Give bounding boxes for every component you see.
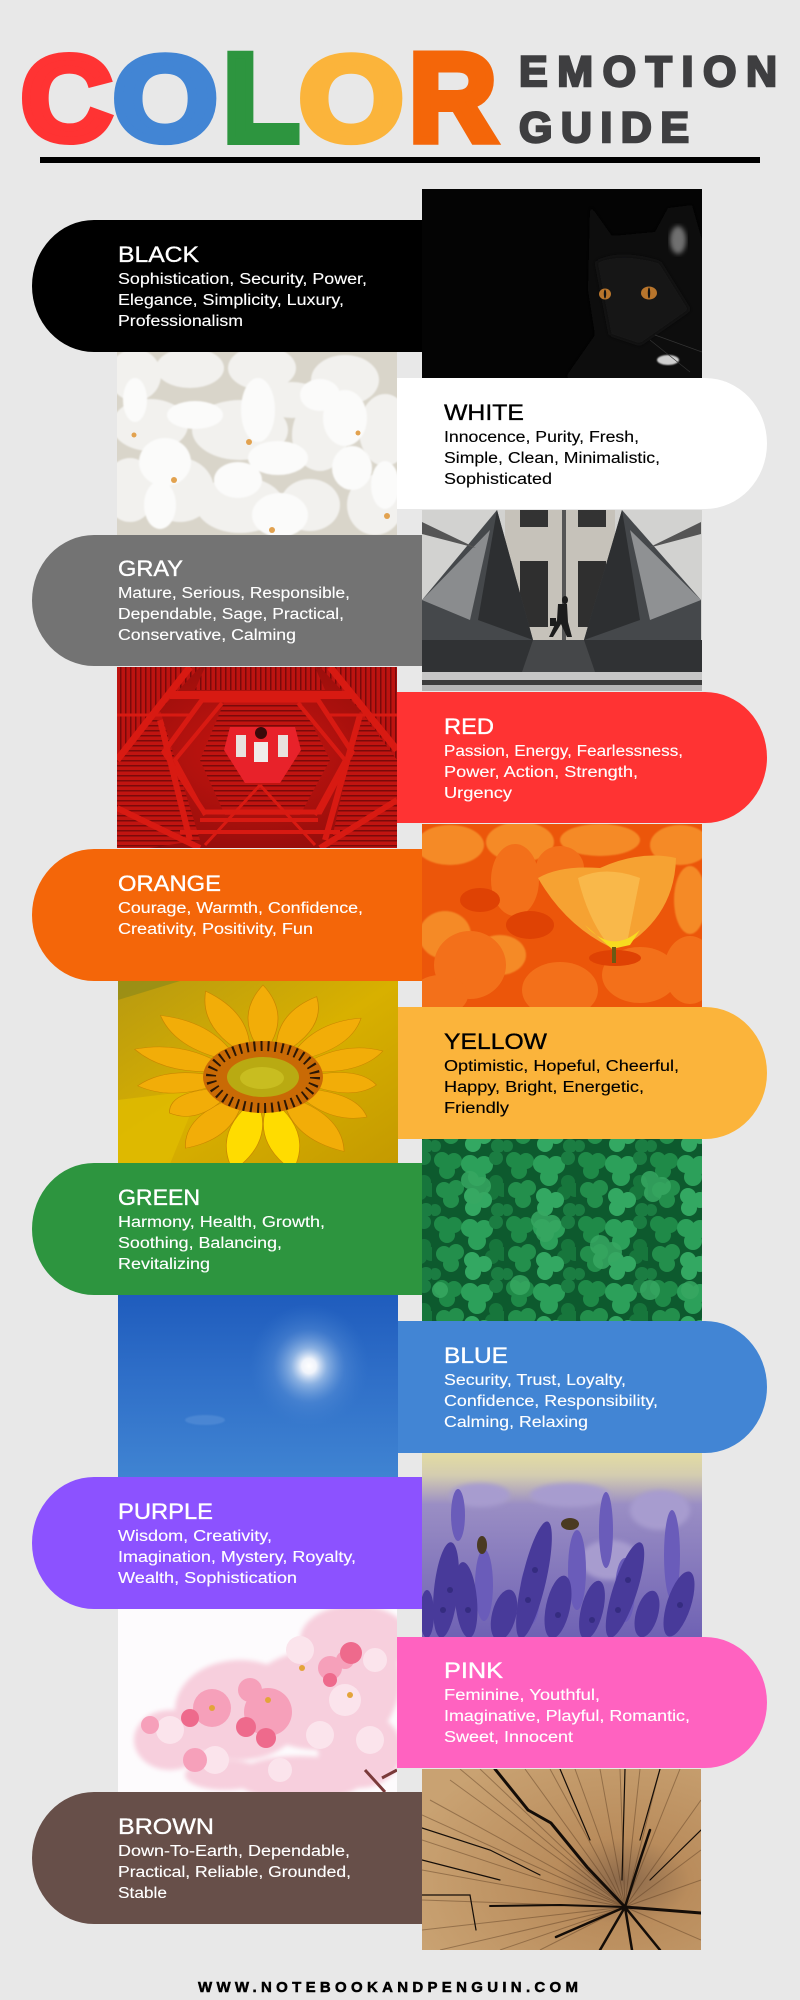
blue heading: BLUE xyxy=(444,1343,508,1368)
green description: Soothing, Balancing, xyxy=(118,1235,282,1252)
yellow pill xyxy=(398,1007,767,1139)
red description: Power, Action, Strength, xyxy=(444,764,638,781)
white heading: WHITE xyxy=(444,400,524,425)
black pill xyxy=(32,220,422,352)
purple description xyxy=(118,1528,356,1587)
photo: green clover xyxy=(422,1139,702,1321)
yellow description: Happy, Bright, Energetic, xyxy=(444,1079,644,1096)
brown description: Practical, Reliable, Grounded, xyxy=(118,1864,351,1881)
big yellow tulip xyxy=(538,856,676,963)
brown description xyxy=(118,1843,351,1902)
purple description: Imagination, Mystery, Royalty, xyxy=(118,1549,356,1566)
brown description: Stable xyxy=(118,1885,167,1902)
white pill xyxy=(397,378,767,509)
gray description: Conservative, Calming xyxy=(118,627,296,644)
green pill xyxy=(32,1163,422,1295)
pink heading: PINK xyxy=(444,1658,503,1683)
gray description xyxy=(118,585,350,644)
purple description: Wisdom, Creativity, xyxy=(118,1528,272,1545)
blue description: Confidence, Responsibility, xyxy=(444,1393,658,1410)
title: COLOR: R xyxy=(409,29,497,168)
pink description xyxy=(444,1687,690,1746)
photo: blue sky with sun xyxy=(118,1295,398,1477)
red heading: RED xyxy=(444,714,494,739)
panel: gray xyxy=(32,535,422,666)
blue description xyxy=(444,1372,658,1431)
pink description: Feminine, Youthful, xyxy=(444,1687,600,1704)
purple description: Wealth, Sophistication xyxy=(118,1570,297,1587)
orange heading: ORANGE xyxy=(118,871,221,896)
title: COLOR: O xyxy=(299,32,404,165)
panel: yellow xyxy=(398,1007,767,1139)
photo: black cat xyxy=(422,189,702,378)
orange description: Courage, Warmth, Confidence, xyxy=(118,900,363,917)
title: COLOR: O xyxy=(113,32,218,165)
panel: green xyxy=(32,1163,422,1295)
black description: Sophistication, Security, Power, xyxy=(118,271,367,288)
title rule xyxy=(40,157,760,163)
subtitle: EMOTION GUIDE xyxy=(519,48,777,152)
blue description: Calming, Relaxing xyxy=(444,1414,588,1431)
brown heading: BROWN xyxy=(118,1814,214,1839)
brown description: Down-To-Earth, Dependable, xyxy=(118,1843,350,1860)
panel: pink xyxy=(397,1637,767,1768)
brown pill xyxy=(32,1792,422,1924)
purple heading: PURPLE xyxy=(118,1499,213,1524)
title: COLOR: C xyxy=(21,33,112,166)
title: COLOR: L xyxy=(223,29,299,168)
photo: lavender xyxy=(422,1453,702,1637)
photo: white flowers xyxy=(117,352,397,535)
blue pill xyxy=(398,1321,767,1453)
orange description xyxy=(118,900,363,938)
photo: red temple ceiling xyxy=(117,667,397,848)
title: COLOR xyxy=(21,29,497,168)
yellow heading: YELLOW xyxy=(444,1029,547,1054)
orange pill xyxy=(32,849,422,981)
photo: sunflower xyxy=(118,981,398,1163)
gray description: Mature, Serious, Responsible, xyxy=(118,585,350,602)
white description: Sophisticated xyxy=(444,471,552,488)
yellow description: Friendly xyxy=(444,1100,509,1117)
panel: white xyxy=(397,378,767,509)
green description: Revitalizing xyxy=(118,1256,210,1273)
photo: pink blossoms xyxy=(118,1609,397,1792)
gray description: Dependable, Sage, Practical, xyxy=(118,606,344,623)
white description: Simple, Clean, Minimalistic, xyxy=(444,450,660,467)
white description xyxy=(444,429,660,488)
panel: red xyxy=(397,692,767,823)
orange description: Creativity, Positivity, Fun xyxy=(118,921,313,938)
gray heading: GRAY xyxy=(118,556,183,581)
footer url: WWW.NOTEBOOKANDPENGUIN.COM xyxy=(198,1979,578,1996)
gray pill xyxy=(32,535,422,666)
purple pill xyxy=(32,1477,422,1609)
panel: black xyxy=(32,220,422,352)
panel: orange xyxy=(32,849,422,981)
pink description: Imaginative, Playful, Romantic, xyxy=(444,1708,690,1725)
black heading: BLACK xyxy=(118,242,199,267)
yellow description: Optimistic, Hopeful, Cheerful, xyxy=(444,1058,679,1075)
blue description: Security, Trust, Loyalty, xyxy=(444,1372,626,1389)
green heading: GREEN xyxy=(118,1185,200,1210)
black description: Elegance, Simplicity, Luxury, xyxy=(118,292,344,309)
panel: blue xyxy=(398,1321,767,1453)
person xyxy=(549,596,572,637)
red pill xyxy=(397,692,767,823)
green description xyxy=(118,1214,325,1273)
subtitle: EMOTION GUIDE: GUIDE xyxy=(519,104,689,152)
red description xyxy=(444,743,683,802)
black description: Professionalism xyxy=(118,313,243,330)
pink description: Sweet, Innocent xyxy=(444,1729,574,1746)
photo: gray architecture xyxy=(422,510,702,691)
subtitle: EMOTION GUIDE: EMOTION xyxy=(519,48,777,96)
black description xyxy=(118,271,367,330)
yellow description xyxy=(444,1058,679,1117)
photo: orange tulips xyxy=(422,824,702,1007)
panel: brown xyxy=(32,1792,422,1924)
pink pill xyxy=(397,1637,767,1768)
photo: cracked wood xyxy=(422,1769,701,1950)
green description: Harmony, Health, Growth, xyxy=(118,1214,325,1231)
red description: Passion, Energy, Fearlessness, xyxy=(444,743,683,760)
panel: purple xyxy=(32,1477,422,1609)
white description: Innocence, Purity, Fresh, xyxy=(444,429,639,446)
red description: Urgency xyxy=(444,785,512,802)
